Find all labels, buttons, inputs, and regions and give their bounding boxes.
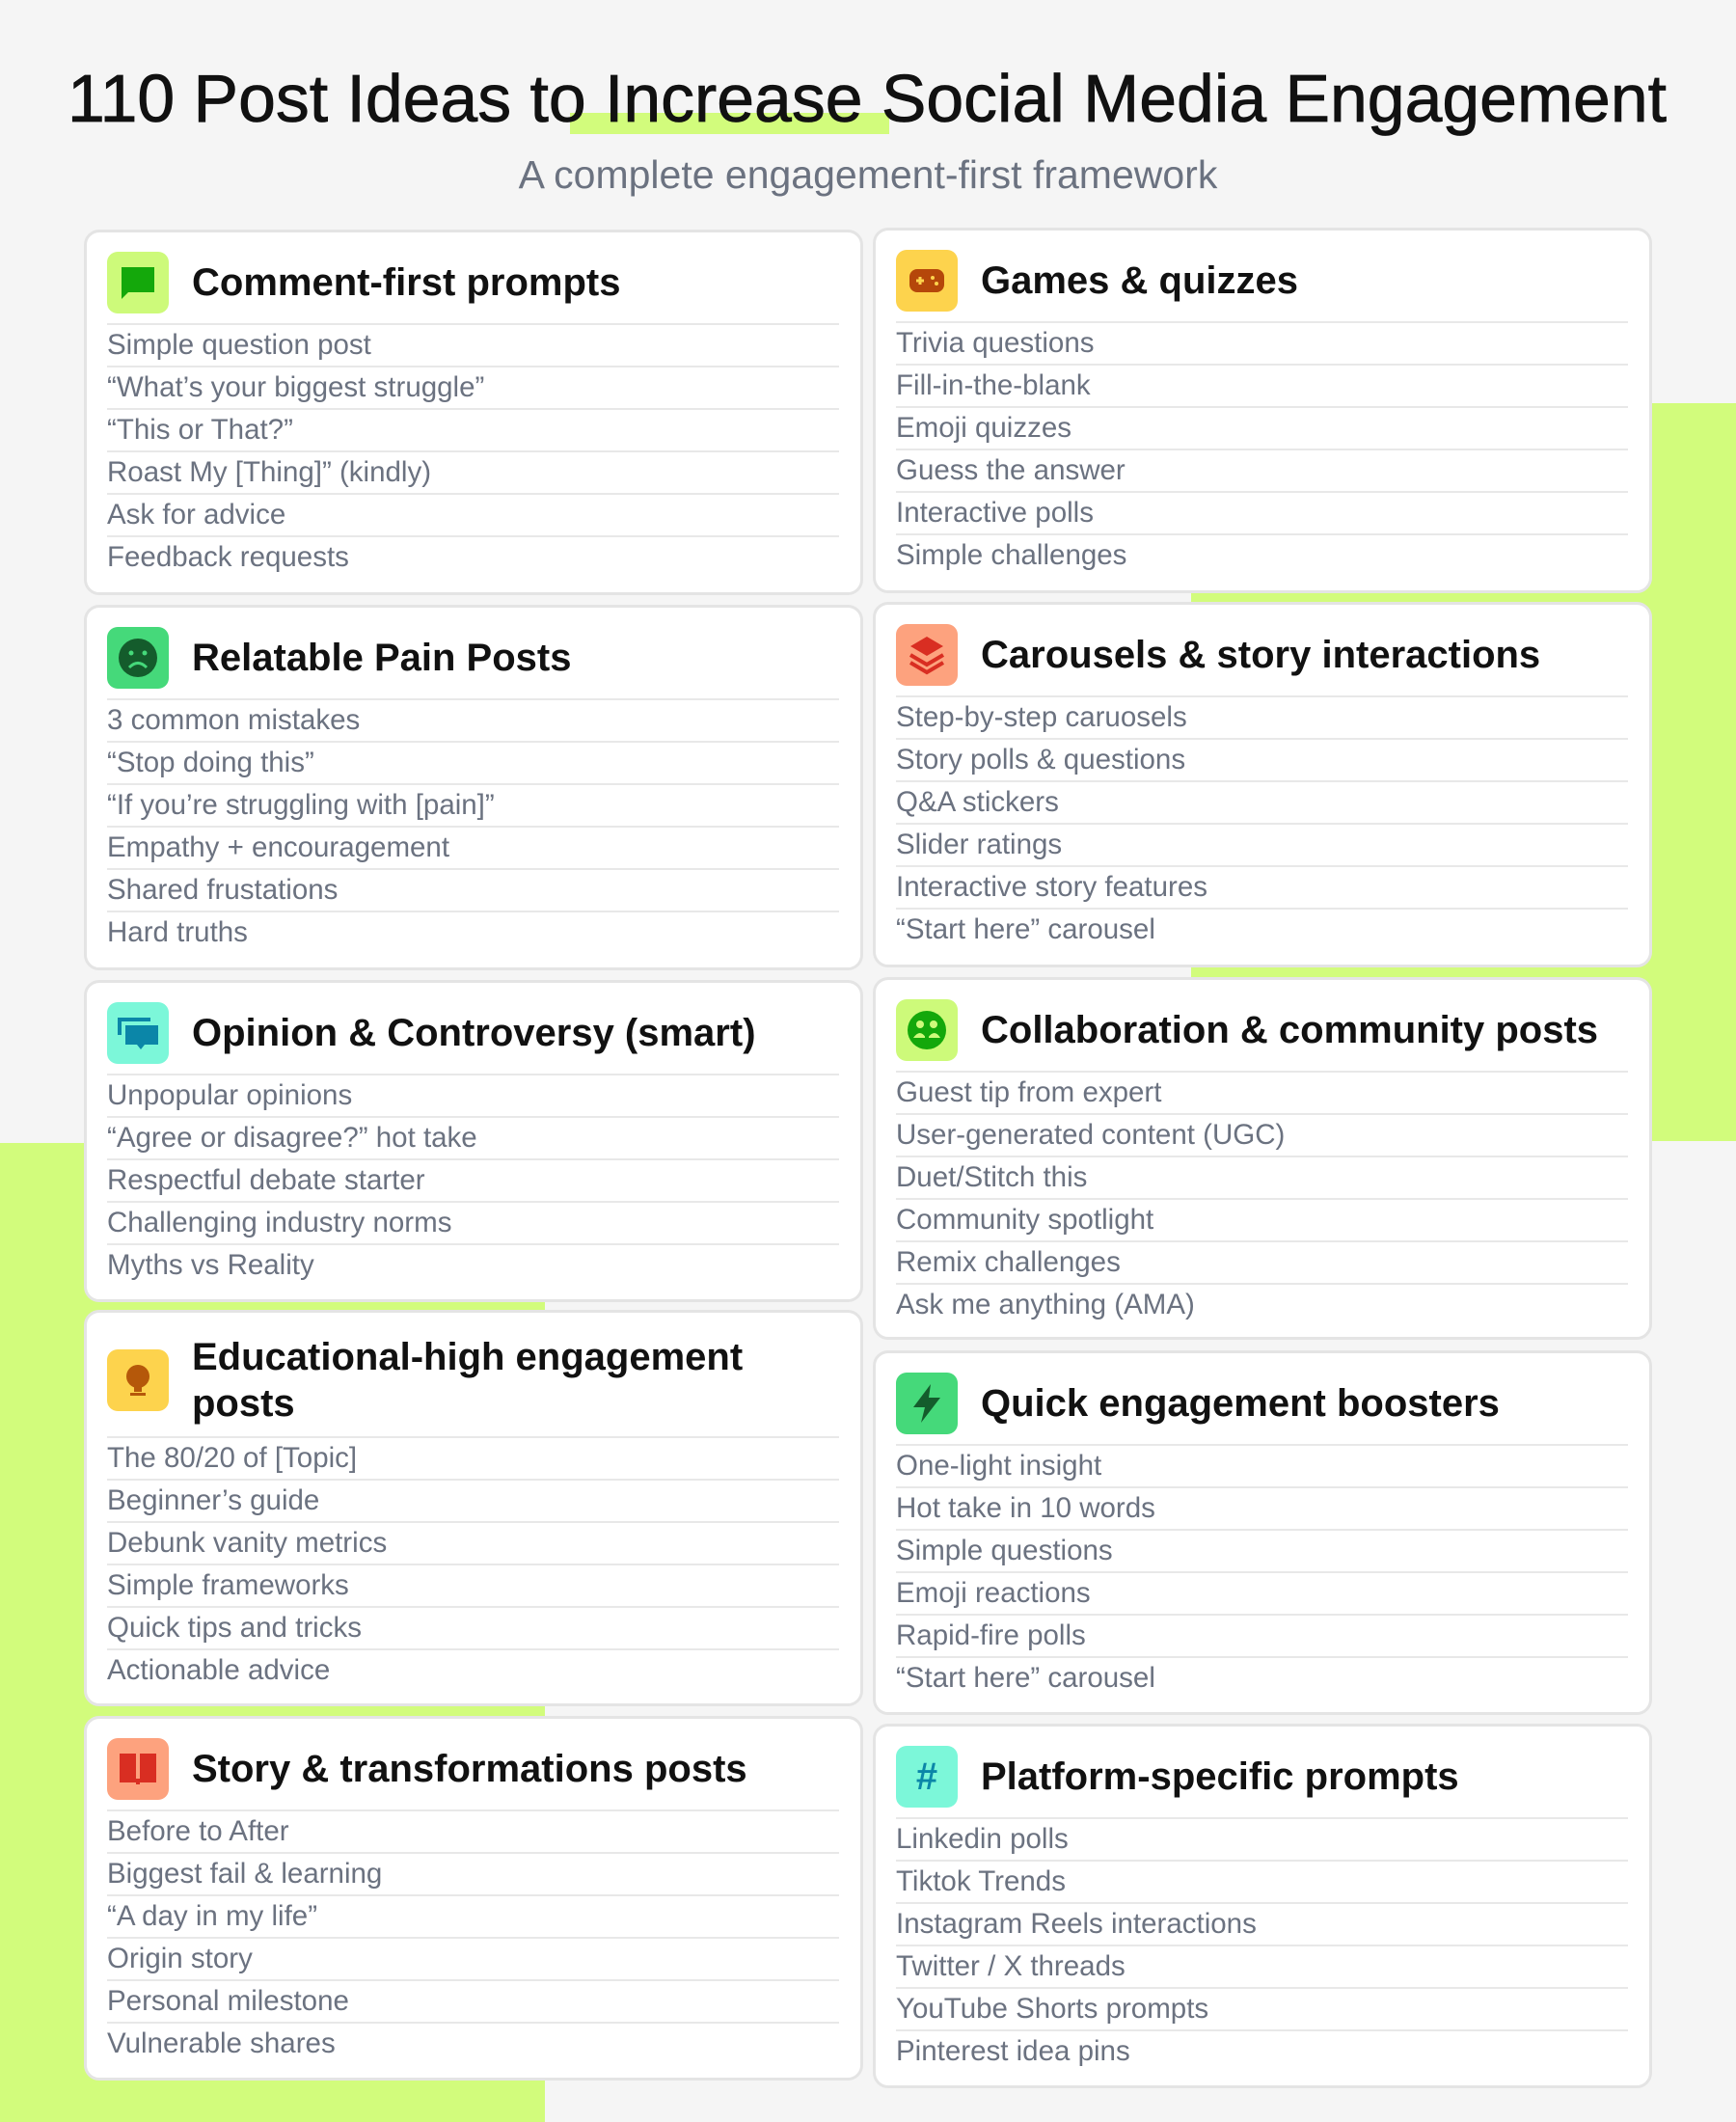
subtitle: A complete engagement-first framework: [519, 152, 1217, 197]
panel: quick engagement boosters: Rapid-fire polls: [896, 1619, 1086, 1651]
panel: platform-specific prompts: Platform-specific prompts: [981, 1755, 1459, 1798]
panel: relatable pain posts: [84, 605, 863, 970]
panel: opinion & controversy: Challenging industry norms: [107, 1207, 451, 1238]
panel: story & transformations: Biggest fail & learning: [107, 1858, 382, 1890]
icon: layers: [896, 624, 958, 686]
icon: sad face: [107, 627, 169, 689]
panel: collaboration & community: [873, 977, 1652, 1340]
panel: platform-specific prompts: Pinterest idea pins: [896, 2035, 1130, 2067]
panel: quick engagement boosters: “Start here” carousel: [896, 1662, 1155, 1694]
panel: carousels & story interactions: Slider ratings: [896, 829, 1062, 860]
panel: educational: Actionable advice: [107, 1654, 330, 1686]
panel: comment-first prompts: Simple question post: [107, 329, 371, 361]
panel: comment-first prompts: Ask for advice: [107, 499, 285, 530]
panel: story & transformations: “A day in my life”: [107, 1900, 317, 1932]
panel: opinion & controversy: [84, 980, 863, 1302]
panel: quick engagement boosters: Quick engagement boosters: [981, 1382, 1500, 1425]
panel: relatable pain posts: 3 common mistakes: [107, 704, 360, 736]
panel: opinion & controversy: Respectful debate starter: [107, 1164, 425, 1196]
panel: games & quizzes: Interactive polls: [896, 497, 1094, 529]
panel: games & quizzes: Emoji quizzes: [896, 412, 1071, 444]
panel: story & transformations: Personal milestone: [107, 1985, 349, 2017]
panel: story & transformations: Story & transformations posts: [192, 1748, 747, 1790]
panel: relatable pain posts: Shared frustations: [107, 874, 338, 906]
icon: book: [107, 1738, 169, 1800]
panel: relatable pain posts: Empathy + encouragement: [107, 831, 449, 863]
panel: carousels & story interactions: Step-by-step caruosels: [896, 701, 1187, 733]
panel: games & quizzes: Trivia questions: [896, 327, 1094, 359]
panel: games & quizzes: Games & quizzes: [981, 259, 1298, 302]
panel: comment-first prompts: “This or That?”: [107, 414, 293, 446]
panel: opinion & controversy: Unpopular opinions: [107, 1079, 352, 1111]
panel: relatable pain posts: Hard truths: [107, 916, 248, 948]
panel: educational: Debunk vanity metrics: [107, 1527, 387, 1559]
panel: opinion & controversy: Myths vs Reality: [107, 1249, 314, 1281]
icon: speech bubble: [107, 252, 169, 313]
panel: carousels & story interactions: “Start here” carousel: [896, 913, 1155, 945]
panel: educational: Simple frameworks: [107, 1569, 349, 1601]
panel: games & quizzes: Simple challenges: [896, 539, 1126, 571]
panel: comment-first prompts: Comment-first prompts: [192, 261, 620, 304]
panel: opinion & controversy: Opinion & Controversy (smart): [192, 1012, 756, 1054]
panel: comment-first prompts: Feedback requests: [107, 541, 349, 573]
panel: quick engagement boosters: [873, 1350, 1652, 1715]
panel: story & transformations: Vulnerable shares: [107, 2027, 336, 2059]
panel: story & transformations: Origin story: [107, 1943, 253, 1974]
panel: games & quizzes: [873, 228, 1652, 593]
icon: gamepad: [896, 250, 958, 312]
panel: carousels & story interactions: [873, 602, 1652, 967]
title: 110 Post Ideas to Increase Social Media Engagement: [68, 61, 1667, 136]
panel: carousels & story interactions: Interactive story features: [896, 871, 1207, 903]
panel: platform-specific prompts: Twitter / X threads: [896, 1950, 1126, 1982]
panel: platform-specific prompts: Linkedin polls: [896, 1823, 1069, 1855]
panel: relatable pain posts: “Stop doing this”: [107, 747, 314, 778]
panel: comment-first prompts: Roast My [Thing]” (kindly): [107, 456, 431, 488]
panel: comment-first prompts: “What’s your biggest struggle”: [107, 371, 484, 403]
panel: collaboration & community: Ask me anything (AMA): [896, 1289, 1195, 1320]
icon: lightbulb: [107, 1349, 169, 1411]
icon: chat boxes: [107, 1002, 169, 1064]
panel: opinion & controversy: “Agree or disagree?” hot take: [107, 1122, 477, 1154]
icon: hashtag: [896, 1746, 958, 1808]
panel: quick engagement boosters: One-light insight: [896, 1450, 1101, 1482]
panel: platform-specific prompts: Instagram Reels interactions: [896, 1908, 1257, 1940]
panel: quick engagement boosters: Emoji reactions: [896, 1577, 1091, 1609]
panel: collaboration & community: Remix challenges: [896, 1246, 1121, 1278]
panel: platform-specific prompts: YouTube Shorts prompts: [896, 1993, 1208, 2025]
panel: educational: Beginner’s guide: [107, 1484, 319, 1516]
panel: story & transformations: [84, 1716, 863, 2081]
panel: carousels & story interactions: Carousels & story interactions: [981, 634, 1540, 676]
icon: community: [896, 999, 958, 1061]
panel: educational: posts: [192, 1382, 295, 1425]
panel: story & transformations: Before to After: [107, 1815, 289, 1847]
icon: hashtag: #: [916, 1755, 937, 1798]
panel: educational: Educational-high engagement: [192, 1336, 743, 1378]
panel: educational: Quick tips and tricks: [107, 1612, 362, 1644]
panel: comment-first prompts: [84, 230, 863, 595]
panel: collaboration & community: Collaboration & community posts: [981, 1009, 1598, 1051]
panel: educational: The 80/20 of [Topic]: [107, 1442, 357, 1474]
panel: quick engagement boosters: Hot take in 10 words: [896, 1492, 1155, 1524]
panel: collaboration & community: User-generated content (UGC): [896, 1119, 1285, 1151]
panel: collaboration & community: Community spotlight: [896, 1204, 1153, 1236]
panel: relatable pain posts: “If you’re struggling with [pain]”: [107, 789, 495, 821]
panel: platform-specific prompts: Tiktok Trends: [896, 1865, 1066, 1897]
panel: carousels & story interactions: Q&A stickers: [896, 786, 1059, 818]
panel: collaboration & community: Duet/Stitch this: [896, 1161, 1087, 1193]
panel: quick engagement boosters: Simple questions: [896, 1535, 1113, 1566]
panel: games & quizzes: Guess the answer: [896, 454, 1126, 486]
icon: lightning: [896, 1373, 958, 1434]
panel: games & quizzes: Fill-in-the-blank: [896, 369, 1091, 401]
panel: relatable pain posts: Relatable Pain Posts: [192, 637, 571, 679]
panel: collaboration & community: Guest tip from expert: [896, 1076, 1161, 1108]
panel: educational: [84, 1310, 863, 1706]
panel: carousels & story interactions: Story polls & questions: [896, 744, 1185, 775]
panel: platform-specific prompts: [873, 1724, 1652, 2088]
